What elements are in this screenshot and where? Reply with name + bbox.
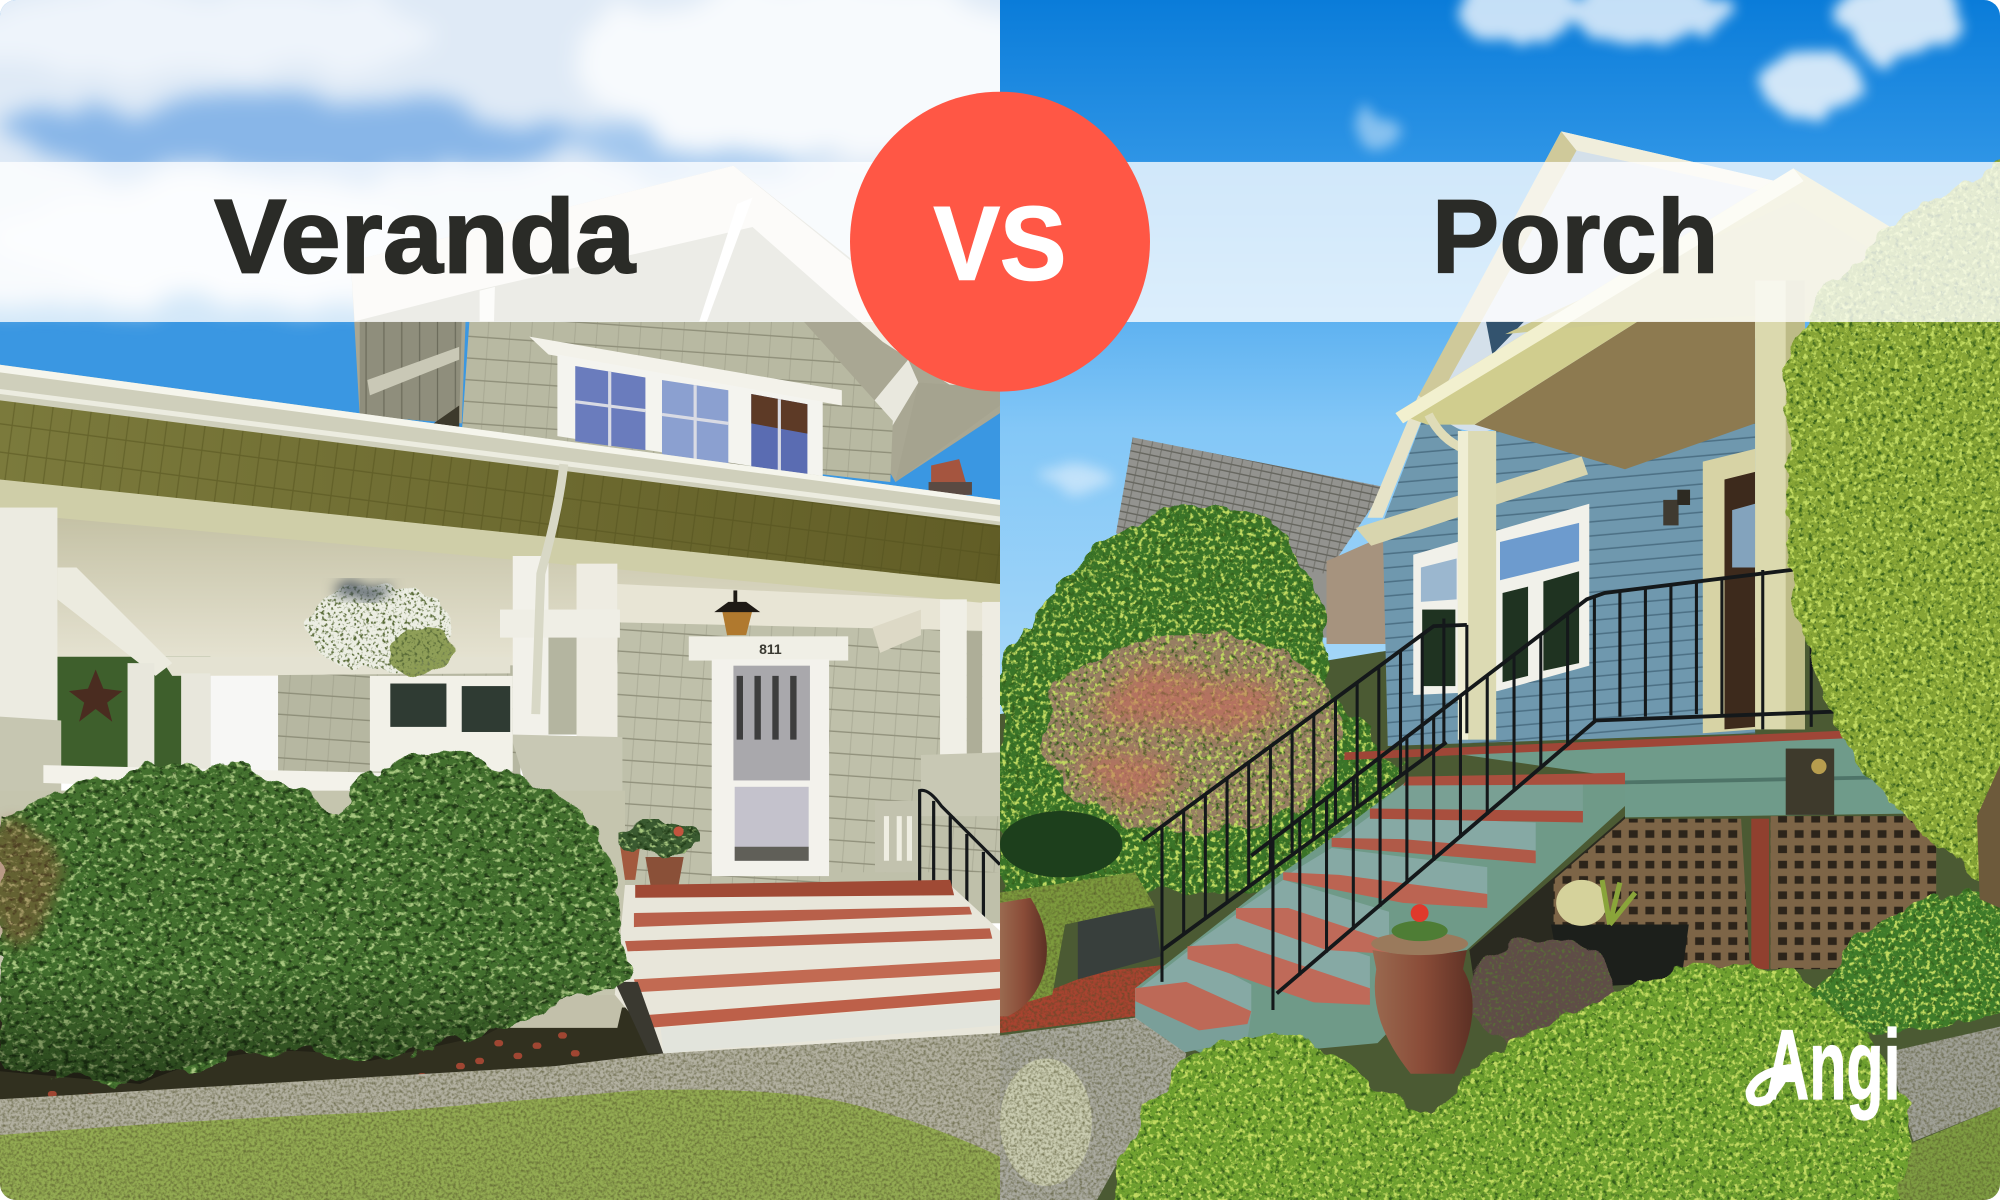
bay window [1413,504,1589,695]
blue clapboard wall [1383,408,1755,746]
chimney [929,459,972,495]
lower eave trim [1356,457,1588,546]
flower bed [1469,939,1617,1051]
rear gable [1367,131,1776,518]
bush lower shade [0,982,586,1084]
star ornament [69,670,122,722]
wall lamp [1663,490,1690,525]
left tree [1000,503,1403,893]
porch: olive shingled fascia [0,395,1000,584]
red-tinted shrub [0,821,59,939]
dark hedge [1000,811,1122,877]
pale grasses [1000,1058,1092,1186]
hanging flower basket [306,583,454,673]
green bush [0,746,628,1084]
neighbour house [1116,437,1390,644]
stair railing [918,788,1000,917]
panel: porch photo scene [1000,0,2000,1200]
window on porch [370,676,513,772]
lattice skirting [1469,816,1936,1020]
porch soffit [1474,321,1755,469]
left urn [1000,898,1047,1016]
porch: ceiling [57,518,946,676]
translucent title band [0,162,2000,322]
right tree [1784,153,2000,912]
deck [1344,729,1912,817]
right grass [1888,1107,2000,1200]
pink flowering shrub [1042,634,1343,833]
porch floor behind stair rail [829,872,1000,923]
porch: front door: 811 [759,641,782,657]
dormer: shingled wall [462,321,893,482]
steps bench [875,801,918,872]
clouds: left sky [0,0,1071,306]
grass clump [1811,891,2000,1034]
lawn [0,1090,1008,1200]
garden base [1000,638,2000,1200]
low hedge [1000,872,1154,1010]
Angi logo: Angi [1765,1010,1901,1121]
dormer: roof and soffit [351,166,1008,482]
Angi logo [1750,1010,1901,1121]
lower wall downspout [1429,414,1464,449]
veranda railing [43,765,383,793]
staircase [1135,773,1625,1058]
heading: Porch: Porch [1432,178,1719,295]
dormer: three-pane window [529,337,842,477]
porch: front door [689,636,848,876]
VS badge: VS [934,185,1066,302]
mulch bed [0,1008,664,1100]
porch: white beam [0,474,1000,604]
under-stair planter [1551,880,1689,988]
concrete walkway left [1000,1018,1186,1200]
foreground bushes [1103,964,1911,1200]
staircase [615,880,1000,1053]
porch posts [1458,281,1805,740]
central urn with flowers [1371,904,1473,1074]
front door [1703,449,1755,733]
porch: back wall [57,567,1000,893]
roof gutter [0,365,1000,525]
retaining wall [1078,908,1161,979]
heading: Veranda: Veranda [214,178,636,295]
mulch bed [1000,963,1199,1033]
concrete walkway [0,1025,1000,1200]
downspout [536,464,564,714]
sky gradient [1000,0,2000,714]
flower pots [620,821,699,885]
iron railings [1143,567,1837,1010]
lower wall under railing [0,790,625,1008]
VS badge [850,92,1150,392]
sky: blue base [0,0,1000,500]
stone edge [510,1008,622,1028]
clouds: right sky [1047,0,1964,496]
walkway right [1888,1027,2000,1141]
panel: veranda photo scene [0,0,1071,1200]
porch gable trim [1395,168,2000,425]
pink blossoms [1071,670,1276,798]
lantern [714,590,760,635]
porch: columns [0,508,1000,816]
tree trunk [1977,765,2000,908]
